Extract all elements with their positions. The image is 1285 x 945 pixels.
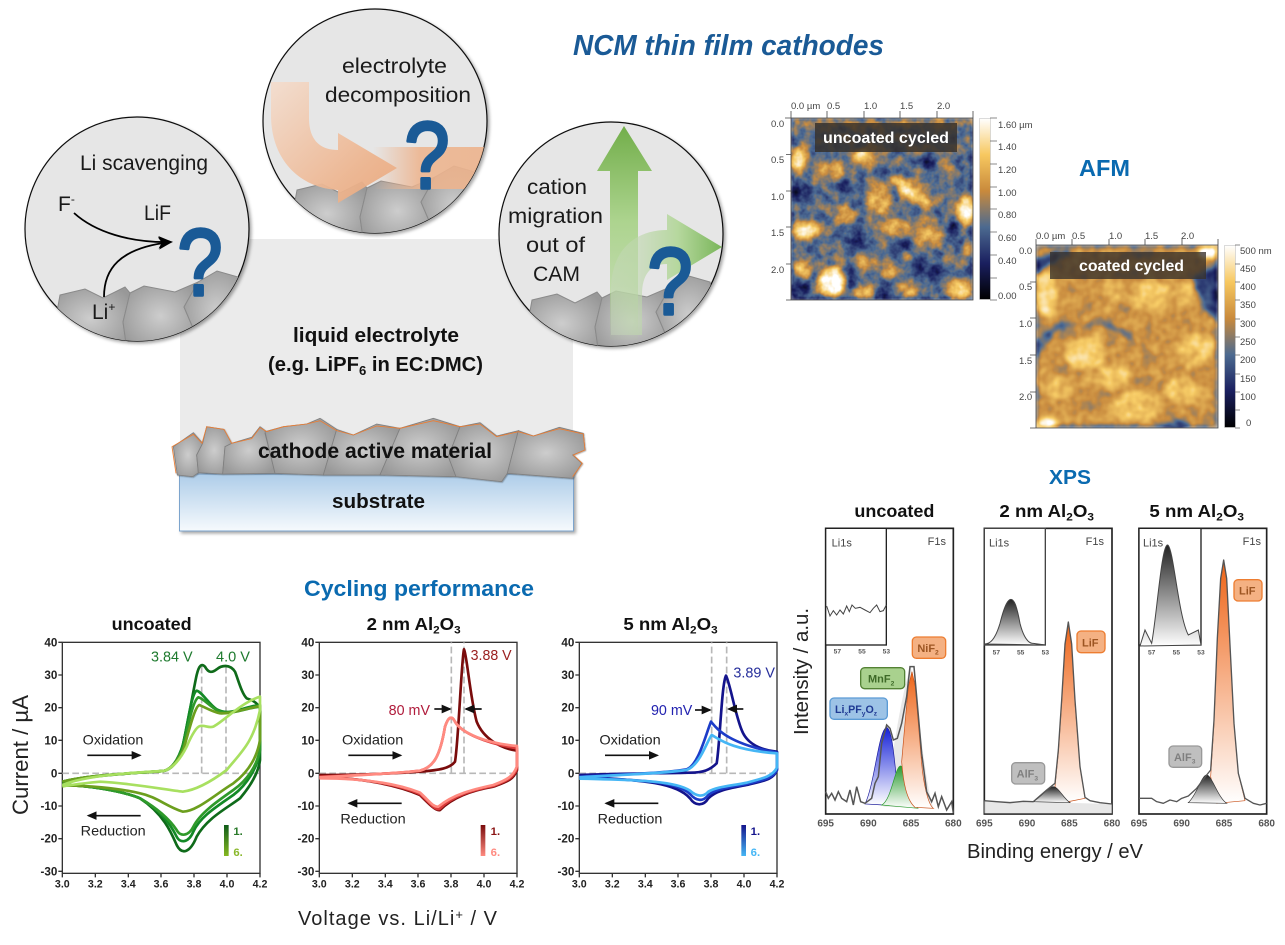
x axis labels: 690: [860, 819, 877, 830]
heading: 2 nm: 2 nm Al: [999, 501, 1064, 521]
top axis labels: 0.0: [771, 119, 784, 130]
AFM image: coated cycled: [1019, 231, 1272, 430]
reduction label and arrow: [598, 803, 662, 826]
y axis labels: 0: [51, 767, 57, 780]
heading: 2 nm: 3: [1087, 511, 1094, 523]
liquid electrolyte layer: [180, 239, 573, 479]
x axis labels: 3.4: [638, 878, 653, 890]
colour scale: 200: [1240, 355, 1256, 366]
colour scale: 300: [1240, 319, 1256, 330]
top axis labels: 1.0: [771, 192, 784, 203]
tag: NiF2: NiF: [917, 643, 935, 655]
x axis labels: 3.6: [411, 878, 425, 890]
axis labels: 0.0 µm: [1036, 231, 1065, 242]
frame ticks: [315, 642, 517, 877]
x axis labels: 695: [976, 819, 993, 830]
decomposition label: decomposition: [325, 84, 471, 107]
chart title: O: [697, 614, 711, 634]
x axis labels: 680: [945, 819, 962, 830]
y axis labels: [557, 636, 574, 878]
x axis labels: 695: [1131, 819, 1148, 830]
colour scale: 0: [1246, 418, 1251, 429]
LiF peak: [1211, 562, 1245, 803]
tag: LixPFyOz: PF: [848, 704, 862, 716]
guide lines: [319, 642, 517, 773]
peak shift annotation: [651, 703, 743, 719]
cycle legend: [481, 825, 500, 859]
reduction label and arrow: Reduction: [598, 810, 662, 826]
cycle legend: 6.: [491, 847, 500, 859]
axis labels: [1019, 231, 1194, 403]
heading: 5 nm: 3: [1237, 511, 1244, 523]
inset Li1s: 57: [1148, 649, 1156, 656]
LiF peak: [1055, 623, 1085, 802]
reduction label and arrow: Reduction: [340, 810, 406, 826]
plot frame: [62, 642, 260, 873]
CV chart: 2 nm: [297, 614, 524, 890]
tag: LiF: LiF: [1082, 637, 1099, 649]
tag: LixPFyOz: O: [866, 704, 874, 716]
colour scale: 150: [1240, 374, 1256, 385]
y axis title: current: Current / µA: [8, 695, 33, 815]
heading: uncoated: uncoated: [854, 501, 934, 521]
reduction label and arrow: [81, 816, 146, 839]
coated banner: [1050, 252, 1206, 279]
AFM heading: AFM: [1079, 155, 1130, 181]
x axis labels: [817, 819, 962, 830]
guide lines: [62, 665, 260, 773]
uncoated banner: [815, 123, 957, 152]
tag: AlF3: AlF: [1174, 752, 1192, 764]
migration label: migration: [508, 205, 603, 228]
F minus label: -: [71, 192, 75, 206]
coated banner: coated cycled: [1079, 258, 1184, 275]
axis labels: 0.5: [1072, 231, 1085, 242]
tag: AlF3: 3: [1192, 759, 1196, 766]
inset Li1s: 57: [834, 649, 841, 656]
CV curves: [319, 649, 517, 810]
x axis labels: 685: [1216, 819, 1233, 830]
y axis labels: 40: [44, 636, 57, 649]
electrolyte formula: 6: [359, 363, 366, 378]
oxidation label and arrow: [599, 731, 661, 755]
x axis labels: 3.2: [88, 878, 103, 890]
colour scale: 350: [1240, 300, 1256, 311]
peak shift annotation: 80 mV: [389, 703, 430, 719]
cation label: cation: [527, 176, 587, 199]
oxidation label and arrow: [342, 731, 403, 755]
spectrum panel: 2 nm: [976, 528, 1121, 830]
oxidation label and arrow: Oxidation: [83, 731, 143, 747]
tag: MnF2: 2: [891, 680, 895, 687]
peak labels: 4.0 V: [216, 650, 250, 666]
CV curves: [62, 665, 260, 851]
AFM image: uncoated cycled: [771, 101, 1033, 302]
peak labels: 3.84 V: [151, 650, 193, 666]
y axis labels: -10: [297, 800, 314, 813]
x axis labels: 680: [1258, 819, 1275, 830]
inset Li1s: 53: [1042, 649, 1049, 656]
x axis labels: 685: [903, 819, 920, 830]
x axis labels: 3.6: [671, 878, 685, 890]
x axis labels: 3.2: [605, 878, 620, 890]
colour scale: 1.20: [998, 165, 1016, 176]
top axis labels: 0.5: [827, 101, 840, 112]
circle: Li scavenging: [25, 117, 250, 350]
electrolyte label: liquid electrolyte: [293, 325, 459, 347]
tag: LixPFyOz: y: [862, 711, 866, 718]
cycle legend: 6.: [233, 847, 243, 859]
orange band: [373, 147, 488, 189]
cycling heading: Cycling performance: [304, 576, 534, 601]
inset Li1s: Li1s: [1143, 538, 1164, 550]
tag: LiF: [1077, 631, 1105, 653]
axis labels: 1.5: [1019, 356, 1032, 367]
y axis labels: 40: [301, 636, 314, 649]
x axis labels: 690: [1173, 819, 1190, 830]
x axis labels: 4.2: [770, 878, 784, 890]
axis labels: 1.0: [1019, 319, 1032, 330]
cathode label: cathode active material: [258, 440, 492, 463]
y axis labels: [40, 636, 57, 878]
height map: [788, 118, 977, 301]
tag: MnF2: MnF: [868, 674, 891, 686]
heading: 5 nm: O: [1223, 501, 1237, 521]
CV curves: [579, 676, 777, 804]
measured curve: [984, 622, 1112, 804]
x axis labels: 4.0: [477, 878, 491, 890]
peak label: 3.88 V: [471, 648, 512, 664]
AlF3 peak: [1033, 787, 1070, 803]
electrolyte label: electrolyte: [342, 55, 447, 78]
peak shift annotation: [389, 703, 482, 719]
heading: 5 nm: 2: [1216, 511, 1223, 523]
colour scale: 0.40: [998, 256, 1016, 267]
XPS heading: XPS: [1049, 467, 1091, 489]
inset Li1s: 53: [883, 649, 890, 656]
title: NCM thin film cathodes: [573, 30, 884, 62]
y axis labels: -30: [40, 865, 57, 878]
cycle legend: 1.: [233, 826, 243, 838]
inset Li1s: 55: [1173, 649, 1180, 656]
x axis title: voltage: Voltage vs. Li/Li: [298, 908, 454, 930]
tag: AlF3: [1169, 746, 1202, 767]
x axis labels: 4.2: [253, 878, 267, 890]
colour scale: 0.60: [998, 233, 1016, 244]
panel: XPS spectra: [817, 501, 1275, 830]
plot frame: [319, 642, 517, 873]
label: F1s: F1s: [1243, 536, 1261, 548]
cycle legend: 6.: [751, 847, 760, 859]
y axis labels: [297, 636, 314, 878]
cycle legend: [224, 825, 243, 859]
height map: [1033, 244, 1223, 430]
AlF3 peak: [1188, 775, 1227, 803]
tag: LiF: [1234, 580, 1262, 601]
top axis labels: [771, 101, 950, 276]
y axis labels: 20: [561, 702, 574, 715]
frame ticks: [58, 642, 260, 877]
reduction label and arrow: Reduction: [81, 823, 146, 839]
y axis labels: 20: [301, 702, 314, 715]
label: F1s: F1s: [1086, 536, 1104, 548]
x axis labels: 3.0: [312, 878, 327, 890]
top axis labels: 1.5: [771, 228, 784, 239]
x axis labels: [976, 819, 1121, 830]
Li scavenging label: Li scavenging: [80, 152, 208, 175]
y axis labels: 30: [301, 669, 314, 682]
y axis labels: -20: [557, 833, 574, 846]
x axis labels: 3.0: [572, 878, 587, 890]
cycle legend: 1.: [491, 826, 500, 838]
F minus label: F: [58, 193, 71, 216]
colour scale: 1.00: [998, 188, 1016, 199]
inset Li1s: [826, 528, 890, 656]
oxidation label and arrow: [83, 731, 143, 755]
x axis labels: 680: [1104, 819, 1121, 830]
peak fills: [865, 667, 933, 808]
x axis labels: 3.8: [187, 878, 201, 890]
colour scale: 450: [1240, 264, 1256, 275]
substrate label: substrate: [332, 491, 425, 513]
x axis labels: 4.0: [737, 878, 751, 890]
x axis title: voltage: / V: [464, 908, 498, 930]
x axis labels: 3.8: [444, 878, 458, 890]
frame: [1030, 239, 1218, 428]
y axis labels: 10: [44, 734, 57, 747]
top axis labels: 2.0: [771, 265, 784, 276]
inset Li1s: Li1s: [989, 538, 1010, 550]
y axis labels: -30: [297, 865, 314, 878]
uncoated banner: uncoated cycled: [823, 130, 949, 147]
x axis labels: [572, 878, 784, 890]
colour scale: 0.80: [998, 210, 1016, 221]
chart title: 2: [433, 624, 440, 636]
question mark: ?: [648, 228, 692, 334]
electrolyte formula: (e.g. LiPF: [268, 354, 358, 376]
peak labels: [151, 650, 250, 666]
tag: LixPFyOz: [830, 698, 887, 719]
guide lines: [579, 642, 777, 773]
measured curve: [1139, 560, 1267, 805]
tag: AlF3: [1012, 763, 1045, 784]
CV chart: 5 nm: [557, 614, 784, 890]
x axis title: voltage: +: [455, 907, 463, 922]
question mark: ?: [405, 102, 449, 208]
tag: NiF2: 2: [935, 650, 939, 657]
colour scale: [980, 118, 1033, 302]
colour scale: 1.40: [998, 142, 1016, 153]
colour scale: 500 nm: [1240, 246, 1272, 257]
heading: 5 nm: 5 nm Al: [1149, 501, 1214, 521]
top axis labels: 0.0 µm: [791, 101, 820, 112]
circle: cation migration: [499, 122, 723, 355]
out of label: out of: [526, 234, 585, 257]
label: F1s: F1s: [928, 536, 946, 548]
oxidation label and arrow: Oxidation: [342, 731, 403, 747]
x axis labels: 3.2: [345, 878, 360, 890]
x axis labels: 3.4: [378, 878, 393, 890]
y axis labels: 30: [44, 669, 57, 682]
CV chart: uncoated: [40, 614, 267, 890]
y axis labels: 0: [568, 767, 574, 780]
panel: cathode schematic: [172, 239, 585, 531]
chart title: O: [440, 614, 454, 634]
x axis labels: 3.4: [121, 878, 136, 890]
x axis labels: [312, 878, 524, 890]
axis labels: 0.5: [1019, 282, 1032, 293]
cycle legend: 1.: [751, 826, 760, 838]
chart title: 3: [454, 624, 461, 636]
tag: AlF3: AlF: [1017, 769, 1034, 781]
y axis labels: -10: [557, 800, 574, 813]
colour scale: 250: [1240, 337, 1256, 348]
axis labels: 2.0: [1019, 392, 1032, 403]
question mark: ?: [178, 209, 222, 315]
x axis labels: 695: [817, 819, 834, 830]
heading: 2 nm: 2: [1066, 511, 1073, 523]
tag: LixPFyOz: x: [844, 711, 848, 718]
x axis labels: 4.2: [510, 878, 524, 890]
tag: LixPFyOz: Li: [835, 704, 844, 716]
spectrum panel: uncoated: [817, 528, 962, 830]
x axis labels: 690: [1019, 819, 1036, 830]
inset Li1s: [1139, 528, 1205, 656]
inset Li1s: 57: [993, 649, 1000, 656]
oxidation label and arrow: Oxidation: [599, 731, 661, 747]
green bent arrow: [611, 214, 722, 335]
electrolyte formula: in EC:DMC): [366, 354, 483, 376]
peak label: 3.89 V: [733, 666, 775, 682]
x axis labels: [1131, 819, 1275, 830]
chart title: 5 nm Al: [623, 614, 688, 634]
XPS y axis title: Intensity / a.u.: [790, 608, 813, 735]
reaction arrows: [74, 213, 171, 297]
tag: NiF2: [912, 637, 946, 658]
green upward arrow: [597, 126, 652, 340]
XPS x axis title: Binding energy / eV: [967, 841, 1144, 863]
Li plus label: +: [108, 300, 115, 314]
background fill: [984, 801, 1112, 813]
colour scale: 100: [1240, 392, 1256, 403]
tag: LixPFyOz: z: [874, 711, 878, 718]
y axis labels: 0: [308, 767, 314, 780]
axis labels: 1.0: [1109, 231, 1122, 242]
y axis labels: 30: [561, 669, 574, 682]
x axis labels: 685: [1061, 819, 1078, 830]
y axis labels: -20: [297, 833, 314, 846]
cathode active material grains: [172, 418, 585, 482]
cycle legend: [741, 825, 760, 859]
frame: [785, 111, 973, 300]
inset Li1s: 55: [858, 649, 866, 656]
top axis labels: 1.0: [864, 101, 877, 112]
y axis labels: -20: [40, 833, 57, 846]
top axis labels: 2.0: [937, 101, 950, 112]
chart title: 2: [690, 624, 697, 636]
colour scale: 400: [1240, 282, 1256, 293]
x axis labels: 3.0: [55, 878, 70, 890]
bent orange arrow: [271, 82, 397, 203]
peak shift annotation: 90 mV: [651, 703, 693, 719]
inset Li1s: [984, 528, 1049, 656]
chart title: uncoated: [112, 614, 192, 634]
CAM label: CAM: [533, 263, 580, 286]
x axis labels: 3.6: [154, 878, 168, 890]
LiF label: LiF: [144, 202, 171, 225]
y axis labels: -10: [40, 800, 57, 813]
x axis labels: 4.0: [220, 878, 234, 890]
chart title: 2 nm Al: [367, 614, 431, 634]
colour scale: 1.60 µm: [998, 120, 1033, 131]
y axis labels: 40: [561, 636, 574, 649]
chart title: 3: [711, 624, 718, 636]
circle: electrolyte decomposition: [263, 9, 488, 245]
Li plus label: Li: [92, 301, 108, 324]
x axis labels: [55, 878, 267, 890]
y axis labels: 10: [301, 734, 314, 747]
measured curve: [826, 667, 953, 813]
spectrum panel: 5 nm: [1131, 528, 1275, 830]
plot frame: [579, 642, 777, 873]
tag: LiF: LiF: [1239, 586, 1256, 598]
inset Li1s: Li1s: [832, 538, 852, 550]
axis labels: 1.5: [1145, 231, 1158, 242]
heading: 2 nm: O: [1073, 501, 1087, 521]
top axis labels: 0.5: [771, 155, 784, 166]
axis labels: 0.0: [1019, 246, 1032, 257]
colour scale: [1224, 245, 1272, 429]
tag: MnF2: [861, 668, 905, 689]
y axis labels: 20: [44, 702, 57, 715]
y axis labels: -30: [557, 865, 574, 878]
reduction label and arrow: [340, 803, 406, 826]
inset Li1s: 53: [1197, 649, 1205, 656]
inset Li1s: 55: [1017, 649, 1025, 656]
top axis labels: 1.5: [900, 101, 913, 112]
colour scale: 0.00: [998, 291, 1016, 302]
tag: AlF3: 3: [1034, 775, 1038, 782]
y axis labels: 10: [561, 734, 574, 747]
substrate layer: [180, 474, 574, 531]
frame ticks: [575, 642, 777, 877]
x axis labels: 3.8: [704, 878, 718, 890]
axis labels: 2.0: [1181, 231, 1194, 242]
